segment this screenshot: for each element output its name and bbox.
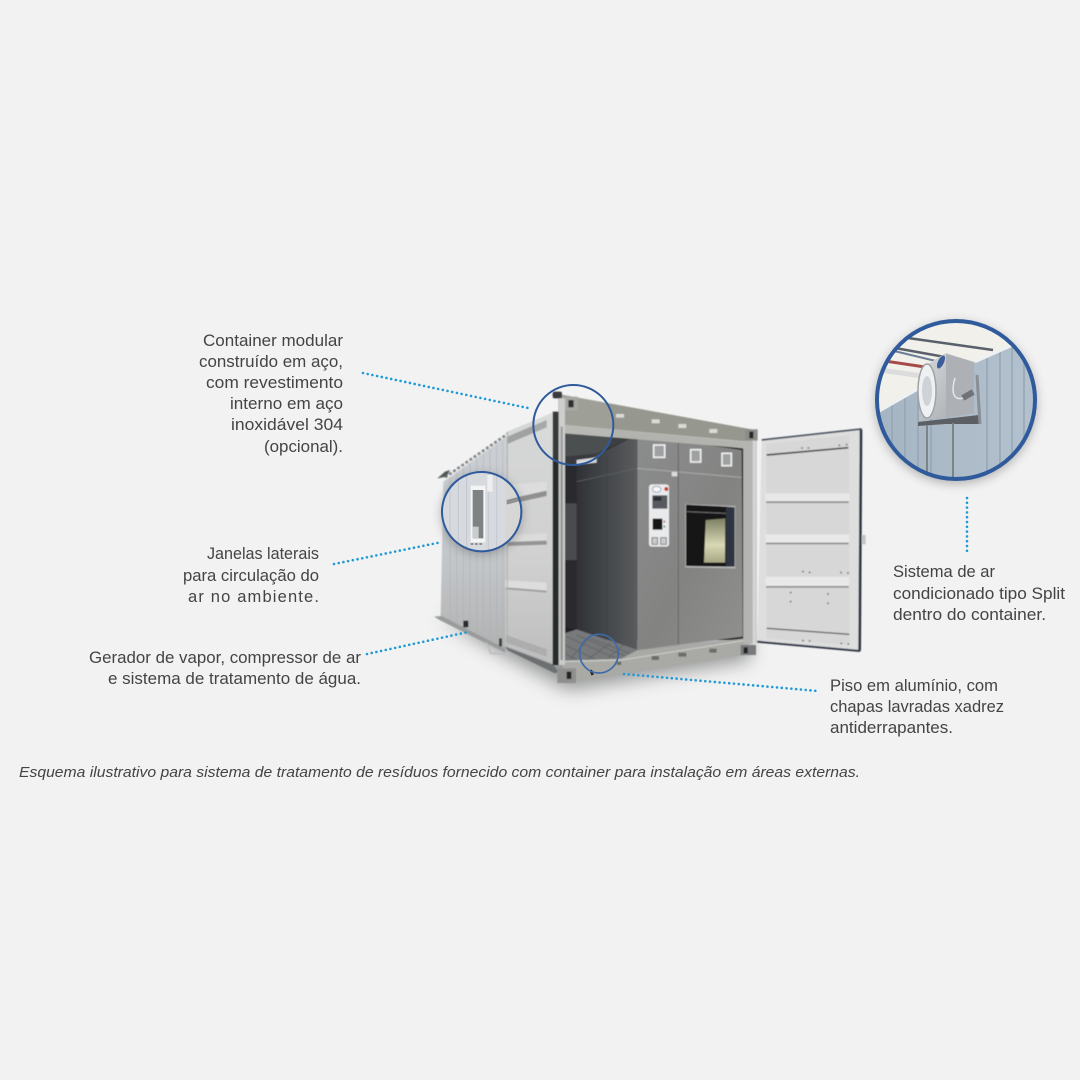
chamber window [685,504,735,568]
leader: windows [334,542,442,564]
leader: generator [367,632,468,654]
interior dark cavity [563,427,743,640]
text: generator description [89,649,362,688]
floor grating [562,629,637,661]
text: windows description: ar no ambiente. [188,588,319,606]
left open door [505,413,558,673]
text: floor description: antiderrapantes. [830,719,953,737]
caption: Esquema ilustrativo para sistema de tratamento de resíduos fornecido com container para instalação em áreas externas. [19,764,860,781]
treatment machine [577,435,743,650]
front floor beam [561,638,755,683]
text: floor description: Piso em alumínio, com [830,677,998,695]
corrugated wall [880,347,1033,477]
text: windows description: Janelas laterais [207,545,319,563]
illustration: container with treatment system [434,385,866,690]
zoom circle: top corner [533,385,613,465]
text: container description [199,332,344,456]
container side wall [434,433,510,654]
text: windows description: para circulação do [183,567,319,585]
control panel [649,484,669,547]
leader: floor [624,674,818,691]
left corner post [553,398,565,665]
text: floor description: chapas lavradas xadrez [830,698,1004,716]
reflection on machine top [577,457,597,465]
ceiling of machine recess [565,432,637,630]
leader: air conditioner [966,498,968,552]
zoom circle: split air conditioner [870,315,1042,490]
right open door [757,429,866,651]
zoom circle: window [440,470,523,555]
ceiling beams [895,338,993,357]
text: air conditioner description [893,563,1065,624]
leader: container [363,373,528,408]
text: container description: com revestimento [206,374,343,392]
machine side face [577,435,637,650]
inspection squares [654,445,731,466]
top beam [553,392,758,448]
text: generator description: Gerador de vapor, compressor de ar [89,649,362,667]
container ground shadow [440,618,750,690]
zoom circle: floor [580,634,618,675]
text: container description: (opcional). [264,438,343,456]
text: air conditioner description: dentro do container. [893,606,1046,624]
text: air conditioner description: Sistema de ar [893,563,996,581]
text: floor description [830,677,1004,737]
text: container description: construído em aço, [199,353,343,371]
right corner post [743,441,757,644]
text: windows description [183,545,319,606]
text: container description: inoxidável 304 [231,416,343,434]
text: container description: Container modular [203,332,344,350]
bracket and legs [918,415,980,426]
text: air conditioner description: condicionado tipo Split [893,585,1065,603]
text: generator description: e sistema de tratamento de água. [108,670,361,688]
text: container description: interno em aço [230,395,343,413]
machine front face [637,435,743,650]
outdoor unit [919,353,974,421]
